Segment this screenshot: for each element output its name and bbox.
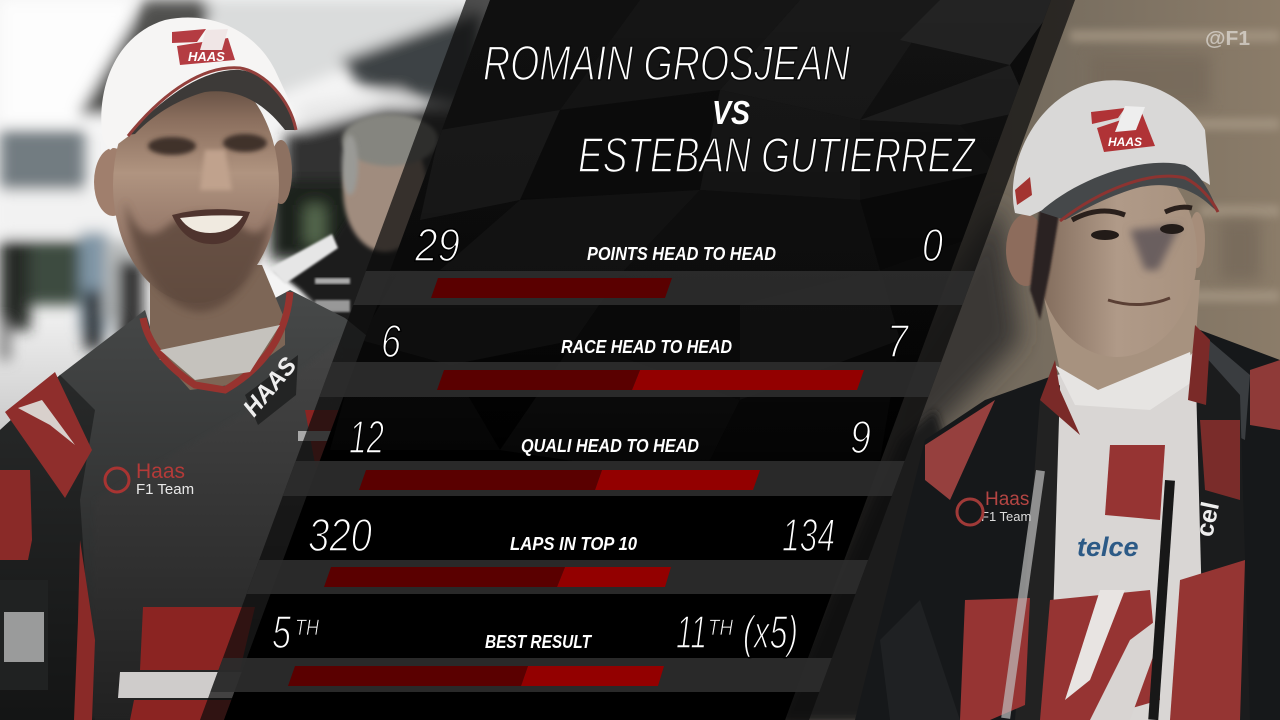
icon: Gutierrez head — [1006, 80, 1218, 435]
label: BEST RESULT — [485, 632, 593, 652]
icon: suit collar — [143, 292, 298, 425]
value: Gutierrez qualifying: 9 — [850, 411, 871, 463]
row: race head to head — [381, 315, 909, 390]
stat bands — [210, 271, 974, 692]
label: POINTS HEAD TO HEAD — [587, 244, 776, 264]
watermark: @F1 — [1205, 28, 1250, 50]
value: Grosjean qualifying: 12 — [349, 411, 384, 463]
icon: racing suit — [0, 290, 380, 720]
bar: comparison — [437, 370, 864, 390]
row: quali head to head — [349, 411, 871, 490]
bar: comparison — [288, 666, 664, 686]
suit badge text: HAAS — [238, 352, 302, 422]
icon: suit logo — [957, 499, 983, 525]
value: Gutierrez races: 7 — [887, 315, 909, 367]
value suffix: Gutierrez: TH — [708, 615, 733, 640]
sponsor text right: cel — [1190, 499, 1225, 539]
bar: comparison — [359, 470, 760, 490]
suit logo text: Haas — [985, 489, 1029, 510]
bar: Grosjean share — [431, 278, 672, 298]
label: RACE HEAD TO HEAD — [561, 337, 732, 357]
panel: translucent outer strip — [200, 0, 1075, 720]
value: Grosjean points: 29 — [414, 219, 460, 271]
low-poly texture — [364, 0, 1051, 413]
photo: Esteban Gutierrez — [780, 0, 1280, 720]
bar: comparison — [324, 567, 671, 587]
value: Gutierrez points: 0 — [922, 219, 943, 271]
label: QUALI HEAD TO HEAD — [521, 436, 699, 456]
icon: cap — [101, 17, 296, 150]
icon: Grosjean head — [94, 17, 298, 425]
value note: times five: (x5) — [743, 606, 798, 658]
suit logo text: Haas — [136, 460, 185, 483]
label: LAPS IN TOP 10 — [510, 534, 637, 554]
cap logo text: HAAS — [188, 49, 225, 64]
suit sponsor text: F1 Team — [136, 481, 194, 498]
panel: dark centre background — [200, 0, 1100, 720]
sponsor text: telce — [1077, 532, 1139, 562]
row: best result — [272, 606, 798, 686]
value suffix: Grosjean: TH — [295, 615, 319, 640]
row: laps in top 10 — [308, 509, 835, 587]
icon: racing suit — [855, 330, 1280, 720]
value: Grosjean best: 5 — [272, 606, 291, 658]
driver name: Grosjean: ROMAIN GROSJEAN — [483, 37, 850, 91]
title: driver names — [483, 37, 977, 183]
value: Gutierrez laps: 134 — [782, 509, 835, 561]
value: Grosjean laps: 320 — [308, 509, 372, 561]
value: Grosjean races: 6 — [381, 315, 401, 367]
icon: suit logo — [105, 468, 129, 492]
driver name: Gutierrez: ESTEBAN GUTIERREZ — [578, 129, 977, 183]
value: Gutierrez best: 11 — [676, 606, 707, 658]
versus label: VS — [712, 94, 750, 131]
cap logo text: HAAS — [1108, 135, 1142, 149]
photo: Romain Grosjean — [0, 0, 520, 720]
icon: cap — [1013, 80, 1218, 221]
suit sponsor text: F1 Team — [981, 509, 1031, 524]
row: points head to head — [414, 219, 943, 298]
icon: background man — [270, 114, 438, 340]
